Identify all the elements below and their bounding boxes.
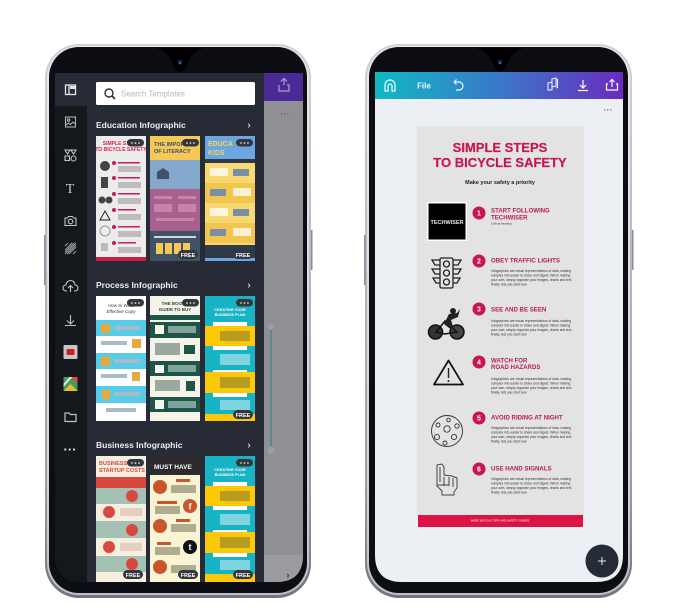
camera notch right bbox=[475, 48, 525, 71]
step 2 traffic light icon bbox=[432, 258, 461, 288]
purple share button bbox=[264, 73, 303, 101]
heading: education infographic: › bbox=[247, 120, 251, 131]
camera notch left bbox=[155, 48, 205, 72]
template: white and sky blue: How to Write bbox=[108, 303, 134, 308]
template: green and cream bbox=[150, 296, 200, 421]
step 4 text: complex info easier to share and digest. When making bbox=[491, 382, 571, 386]
poster title: SIMPLE STEPS bbox=[453, 140, 548, 155]
step 2 text: your own, simply organize your images, charts and text bbox=[491, 278, 572, 282]
step 6 text: your own, simply organize your images, charts and text bbox=[491, 486, 572, 490]
step 5 text: AVOID RIDING AT NIGHT bbox=[491, 414, 563, 422]
step 6 text: USE HAND SIGNALS bbox=[491, 466, 552, 472]
heading: education infographic bbox=[96, 122, 250, 130]
template: green and cream: THE BOOKS bbox=[162, 301, 188, 306]
step 4 text: Infographics are visual representations of data, making bbox=[491, 377, 571, 381]
step 1 text: Critical heading bbox=[491, 222, 512, 226]
step 6 text: Infographics are visual representations of data, making bbox=[491, 477, 571, 481]
step 5 wheel icon bbox=[432, 416, 462, 446]
template: white and sky blue bbox=[96, 296, 146, 421]
heading: education infographic: Education Infographic bbox=[96, 120, 186, 130]
step 6 text: 6 bbox=[477, 466, 481, 474]
step 5 text: complex info easier to share and digest. When making bbox=[491, 430, 571, 434]
step 3 text: SEE AND BE SEEN bbox=[491, 306, 546, 314]
poster title: TO BICYCLE SAFETY bbox=[433, 155, 567, 170]
step 3 text bbox=[472, 302, 572, 336]
template: educate kids: KIDS bbox=[208, 150, 225, 157]
template: creating your business plan again: BUSINESS PLAN bbox=[215, 473, 246, 477]
heading: process infographic: Process Infographic bbox=[96, 280, 178, 290]
more dots: ··· bbox=[604, 105, 612, 115]
template: bicycle safety bbox=[95, 136, 147, 261]
screen left bbox=[55, 73, 303, 582]
step 3 text: Infographics are visual representations of data, making bbox=[491, 319, 571, 323]
template: green and cream: GUIDE TO BUY bbox=[159, 307, 191, 312]
step 1 text: 1 bbox=[477, 210, 481, 218]
sidebar icon: YouTube bbox=[64, 345, 78, 359]
template: must have social: t bbox=[188, 542, 192, 552]
template: creating your business plan again: CREATING YOUR bbox=[214, 468, 246, 472]
template: literacy: THE IMPORT bbox=[154, 142, 189, 148]
template: creating your business plan bbox=[205, 296, 255, 421]
step 3 text: 3 bbox=[477, 306, 481, 314]
heading: business infographic bbox=[96, 442, 250, 450]
template: literacy bbox=[150, 136, 200, 261]
sidebar icon: folder bbox=[65, 413, 76, 422]
toolbar icon: copies bbox=[548, 78, 558, 90]
template: must have social bbox=[150, 456, 200, 582]
step 5 text: finally, lets you start now bbox=[491, 440, 527, 444]
sidebar icon: upload cloud bbox=[63, 281, 78, 292]
step 2 text: complex info easier to share and digest. When making bbox=[491, 274, 571, 278]
poster footer bar: MORE BICYCLE TIPS AND SAFETY GUIDES bbox=[471, 518, 529, 522]
step 2 text: 2 bbox=[477, 258, 481, 266]
step 6 text: complex info easier to share and digest. When making bbox=[491, 482, 571, 486]
step 1 text: START FOLLOWING bbox=[491, 208, 550, 214]
step 4 text: your own, simply organize your images, charts and text bbox=[491, 386, 572, 390]
heading: business infographic: › bbox=[247, 440, 251, 451]
sidebar icon: more: ··· bbox=[64, 442, 76, 457]
step 1 text bbox=[472, 206, 550, 226]
step 6 hand icon bbox=[437, 464, 457, 495]
next page arrow: › bbox=[286, 570, 290, 580]
toolbar icon: home bbox=[385, 80, 395, 91]
template: white and sky blue: Effective Copy bbox=[106, 309, 136, 314]
template: creating your business plan again bbox=[205, 456, 255, 582]
template menu and free badges bbox=[123, 139, 253, 579]
sidebar icon: pattern bbox=[65, 243, 76, 254]
template menu and free badges: FREE bbox=[236, 413, 251, 419]
poster bbox=[417, 126, 584, 527]
more dots on canvas: ··· bbox=[280, 109, 290, 119]
step 6 text: finally, lets you start now bbox=[491, 490, 527, 494]
phone: right, poster editor bbox=[364, 44, 634, 598]
step 6 text bbox=[472, 462, 572, 494]
template: educate kids: EDUCA bbox=[208, 141, 233, 148]
template: bicycle safety: SIMPLE STEPS bbox=[103, 141, 140, 147]
step 2 text bbox=[472, 254, 572, 286]
step 5 text: Infographics are visual representations of data, making bbox=[491, 426, 571, 430]
step 1 techwiser logo: TECHWISER bbox=[430, 220, 464, 226]
step 4 text bbox=[472, 356, 572, 394]
template menu and free badges: FREE bbox=[236, 253, 251, 259]
template: must have social: MUST HAVE bbox=[154, 464, 192, 471]
template menu and free badges: FREE bbox=[181, 573, 196, 579]
heading: process infographic bbox=[96, 282, 250, 290]
sidebar icon: maps bbox=[64, 377, 78, 391]
add button bbox=[586, 544, 618, 578]
step 3 text: complex info easier to share and digest. When making bbox=[491, 324, 571, 328]
poster subtitle: Make your safety a priority bbox=[465, 180, 536, 186]
sidebar icon: photos bbox=[66, 117, 76, 127]
template menu and free badges: FREE bbox=[236, 573, 251, 579]
template: creating your business plan: BUSINESS PLAN bbox=[215, 313, 246, 317]
step 4 text: 4 bbox=[477, 360, 481, 366]
step 3 text: your own, simply organize your images, charts and text bbox=[491, 328, 572, 332]
template: business startup costs bbox=[96, 456, 146, 582]
template: bicycle safety: TO BICYCLE SAFETY bbox=[95, 147, 147, 153]
canvas preview area bbox=[264, 73, 303, 582]
step 5 text: your own, simply organize your images, charts and text bbox=[491, 435, 572, 439]
step 2 text: OBEY TRAFFIC LIGHTS bbox=[491, 258, 560, 264]
step 4 text: ROAD HAZARDS bbox=[491, 364, 540, 371]
step 1 techwiser logo bbox=[427, 202, 467, 241]
step 2 text: finally, lets you start now bbox=[491, 282, 527, 286]
sidebar icon: camera bbox=[65, 216, 76, 226]
page resize handle bbox=[268, 324, 274, 454]
step 2 text: Infographics are visual representations of data, making bbox=[491, 269, 571, 273]
template: educate kids bbox=[205, 136, 255, 261]
step 4 warning icon bbox=[434, 360, 463, 384]
template: literacy: OF LITERACY bbox=[154, 149, 191, 155]
template: business startup costs: STARTUP COSTS bbox=[99, 468, 145, 474]
phone frame right bbox=[364, 44, 634, 598]
toolbar label: file: File bbox=[417, 82, 431, 90]
sidebar icon: elements bbox=[65, 150, 76, 161]
step 5 text bbox=[472, 412, 572, 444]
toolbar icon: download bbox=[578, 80, 588, 90]
poster title bbox=[433, 140, 567, 170]
sidebar bbox=[55, 106, 87, 582]
template: business startup costs: BUSINESS bbox=[99, 461, 127, 467]
template menu and free badges: FREE bbox=[181, 253, 196, 259]
search box bbox=[96, 82, 255, 105]
template: creating your business plan: CREATING YOUR bbox=[214, 308, 246, 312]
template menu and free badges: FREE bbox=[126, 573, 141, 579]
template: must have social: f bbox=[188, 502, 192, 512]
phone: left, template browser bbox=[44, 44, 312, 598]
toolbar icon: share bbox=[606, 80, 618, 90]
screen right bbox=[375, 72, 623, 582]
step 3 text: finally, lets you start now bbox=[491, 332, 527, 336]
sidebar icon: templates bbox=[66, 85, 76, 94]
step 4 text: WATCH FOR bbox=[491, 358, 528, 364]
step 1 text: TECHWISER bbox=[491, 214, 528, 222]
step 3 cyclist icon bbox=[428, 308, 464, 339]
heading: process infographic: › bbox=[247, 280, 251, 291]
phone frame left bbox=[44, 44, 312, 598]
poster footer bar bbox=[418, 515, 583, 527]
search box: Search Templates bbox=[121, 90, 185, 98]
toolbar icon: undo bbox=[454, 80, 463, 90]
step 5 text: 5 bbox=[477, 416, 481, 422]
sidebar icon: text: T bbox=[66, 182, 75, 197]
heading: business infographic: Business Infographic bbox=[96, 440, 183, 450]
sidebar icon: download bbox=[65, 315, 76, 326]
toolbar bbox=[375, 72, 623, 99]
step 4 text: finally, lets you start now bbox=[491, 390, 527, 394]
